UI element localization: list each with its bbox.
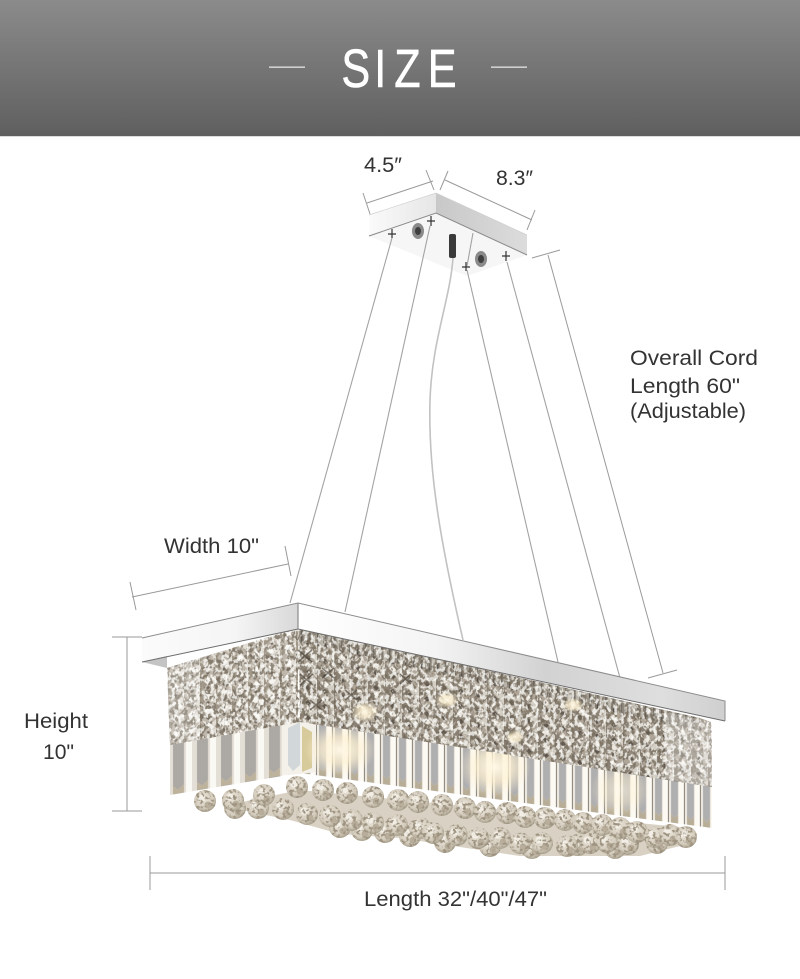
dimension: height: Height [24,710,88,733]
cord length label: Length 60" [630,375,740,398]
dimension: length [150,856,725,911]
dimension: width: Width 10" [164,535,259,558]
ceiling canopy plate [369,193,527,276]
dimension: width [130,535,291,610]
dimension: canopy width 4.5: 4.5″ [364,154,403,177]
electrical cable [430,258,463,640]
dimension: canopy length 8.3 [440,167,535,230]
cord length label: Overall Cord [630,347,758,370]
chrome top bar [142,603,725,721]
dimension: height: 10" [43,741,74,764]
dimension: canopy length 8.3: 8.3″ [496,167,534,190]
ball cluster backing [222,790,690,856]
dimension: height [24,637,142,811]
title: SIZE [341,40,457,99]
title rule left [269,66,305,68]
title rule right [491,66,527,68]
header banner [0,0,800,137]
suspension cords [290,226,620,678]
cord length label [630,347,758,423]
dimension: length: Length 32"/40"/47" [364,888,547,911]
dimension: canopy width 4.5 [363,154,434,214]
upper crystal strands [160,625,720,795]
dimension: cord length [532,250,677,678]
crystal balls [194,776,697,859]
chandelier [142,603,725,859]
faceted prism band [170,717,712,828]
cord length label: (Adjustable) [630,400,746,423]
